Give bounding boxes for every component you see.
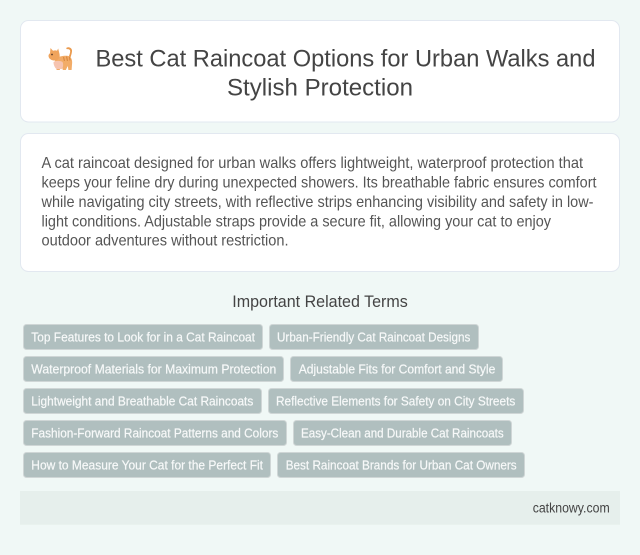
tag: Fashion-Forward Raincoat Patterns and Colors	[31, 426, 278, 440]
tag: Lightweight and Breathable Cat Raincoats	[31, 394, 253, 408]
description text	[41, 155, 597, 250]
description text: keeps your feline dry during unexpected showers. Its breathable fabric ensures comfort	[42, 174, 597, 192]
tag	[24, 420, 286, 446]
tag: Top Features to Look for in a Cat Raincoat	[31, 330, 255, 344]
footer	[20, 491, 620, 525]
tag: Adjustable Fits for Comfort and Style	[299, 362, 495, 376]
description text: A cat raincoat designed for urban walks offers lightweight, waterproof protection that	[42, 155, 583, 172]
title: Best Cat Raincoat Options for Urban Walks and	[96, 46, 596, 73]
tag: Waterproof Materials for Maximum Protection	[31, 362, 276, 376]
panel: description card	[20, 134, 620, 272]
tag	[24, 388, 262, 414]
title	[96, 46, 596, 102]
description text: while navigating city streets, with reflective strips enhancing visibility and safety in low-	[41, 194, 593, 211]
panel: title card	[20, 20, 620, 122]
heading: important related terms: Important Related Terms	[232, 293, 408, 311]
title: Stylish Protection	[227, 75, 413, 102]
tag: Best Raincoat Brands for Urban Cat Owners	[286, 458, 517, 472]
tag	[290, 356, 502, 382]
tag: How to Measure Your Cat for the Perfect Fit	[31, 458, 264, 472]
tag	[294, 420, 512, 446]
tag: Reflective Elements for Safety on City Streets	[276, 394, 515, 408]
tag: Easy-Clean and Durable Cat Raincoats	[301, 426, 504, 440]
tag: Urban-Friendly Cat Raincoat Designs	[277, 330, 470, 344]
tag	[278, 452, 524, 478]
description text: light conditions. Adjustable straps provide a secure fit, allowing your cat to enjoy	[42, 213, 551, 230]
footer: catknowy.com	[533, 500, 610, 515]
tag	[24, 452, 270, 478]
tag	[270, 324, 478, 350]
tag	[24, 356, 284, 382]
related term tags	[24, 324, 524, 478]
description text: outdoor adventures without restriction.	[42, 233, 288, 250]
icon: cat	[48, 47, 72, 70]
tag	[24, 324, 262, 350]
tag	[268, 388, 524, 414]
